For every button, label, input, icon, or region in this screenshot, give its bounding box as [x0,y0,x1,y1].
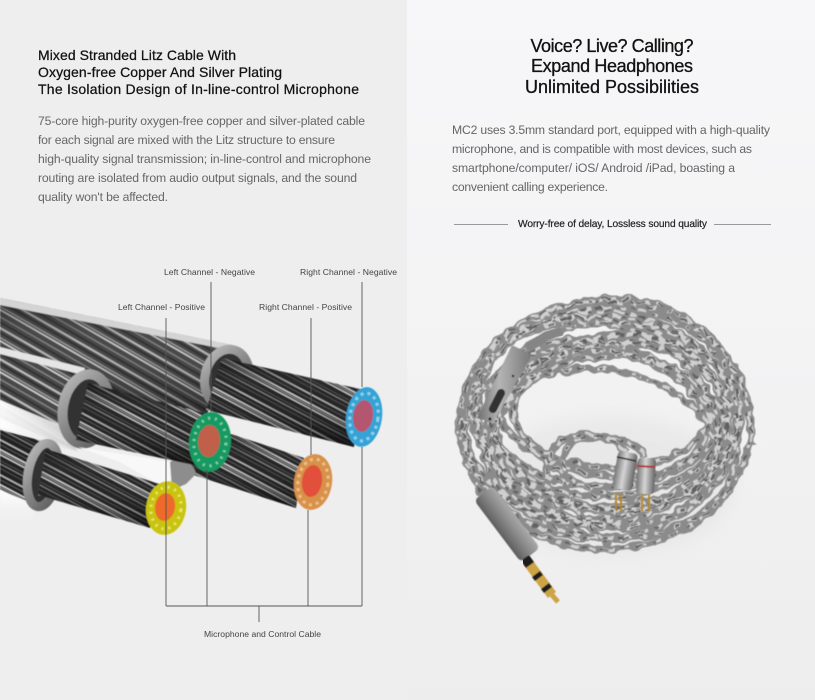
3.5mm gold plug [525,558,558,602]
yellow conductor strands [38,449,160,528]
right body text: microphone, and is compatible with most devices, such as [452,142,752,156]
white sleeve between tubes [78,447,172,492]
blue conductor strands [206,358,360,447]
small inner sleeve [170,460,196,490]
label: right channel positive: Right Channel - Positive [259,302,352,312]
cable cross-section illustration [0,298,386,538]
left body text: routing are isolated from audio output signals, and the sound [38,171,357,185]
3.5mm plug barrel [474,486,540,562]
top tube [0,298,232,420]
middle tube ring [57,371,115,447]
label: left channel negative: Left Channel - Negative [164,267,255,277]
orange conductor end [290,452,336,512]
right heading [525,36,699,97]
tagline with rules: Worry-free of delay, Lossless sound quality [518,219,708,230]
coil strands [437,287,763,569]
green conductor end [186,410,234,474]
2-pin connector right [636,458,656,511]
left heading: Oxygen-free Copper And Silver Plating [38,64,282,80]
yellow conductor end [142,478,190,538]
top tube ring [199,345,255,411]
right body text: smartphone/computer/ iOS/ Android /iPad, boasting a [452,161,735,175]
label: microphone and control cable: Microphone and Control Cable [204,629,321,639]
bottom tube ring [23,441,63,509]
left body text [38,114,371,204]
left body text: quality won't be affected. [38,190,168,204]
label: right channel negative: Right Channel - Negative [300,267,397,277]
right heading: Voice? Live? Calling? [530,36,694,56]
coiled cable photo [437,287,763,602]
left body text: for each signal are mixed with the Litz structure to ensure [38,133,335,147]
left body text: 75-core high-purity oxygen-free copper and silver-plated cable [38,114,365,128]
leader lines [166,282,362,622]
blue conductor end [342,385,386,449]
bottom tube [0,430,48,530]
panel: left background [0,0,407,700]
right body text [452,123,771,194]
label: left channel positive: Left Channel - Positive [118,302,205,312]
right heading: Expand Headphones [531,56,693,76]
right body text: MC2 uses 3.5mm standard port, equipped with a high-quality [452,123,771,137]
left body text: high-quality signal transmission; in-line-control and microphone [38,152,371,166]
green conductor strands [76,383,204,465]
middle tube [0,347,85,452]
right body text: convenient calling experience. [452,180,608,194]
left heading: Mixed Stranded Litz Cable With [38,47,236,63]
orange conductor strands [172,433,304,508]
in-line mic control [477,331,562,423]
right heading: Unlimited Possibilities [525,77,699,97]
left heading [38,47,359,97]
left heading: The Isolation Design of In-line-control Microphone [38,81,359,97]
coil shadow [485,415,735,555]
2-pin connector left [612,451,638,511]
panel: right background [407,0,815,700]
